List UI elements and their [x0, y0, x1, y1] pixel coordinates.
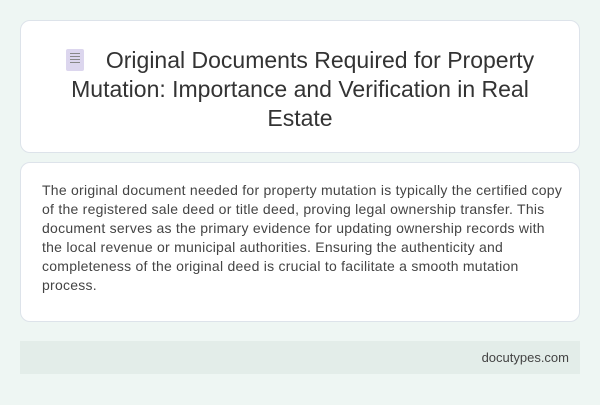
icon: document: [66, 49, 84, 71]
title: Original Documents Required for Property Mutation: Importance and Verification in Real Estate: [71, 47, 534, 131]
panel: title card: [20, 20, 580, 153]
footer text: docutypes.com: [482, 350, 569, 365]
footer: [20, 341, 580, 374]
text block: The original document needed for property mutation is typically the certified copy of the registered sale deed or title deed, proving legal ownership transfer. This document serves as the primary evidence for updating ownership records with the local revenue or municipal authorities. Ensuring the authenticity and completeness of the original deed is crucial to facilitate a smooth mutation process.: [42, 182, 562, 293]
panel: description: [20, 162, 580, 322]
